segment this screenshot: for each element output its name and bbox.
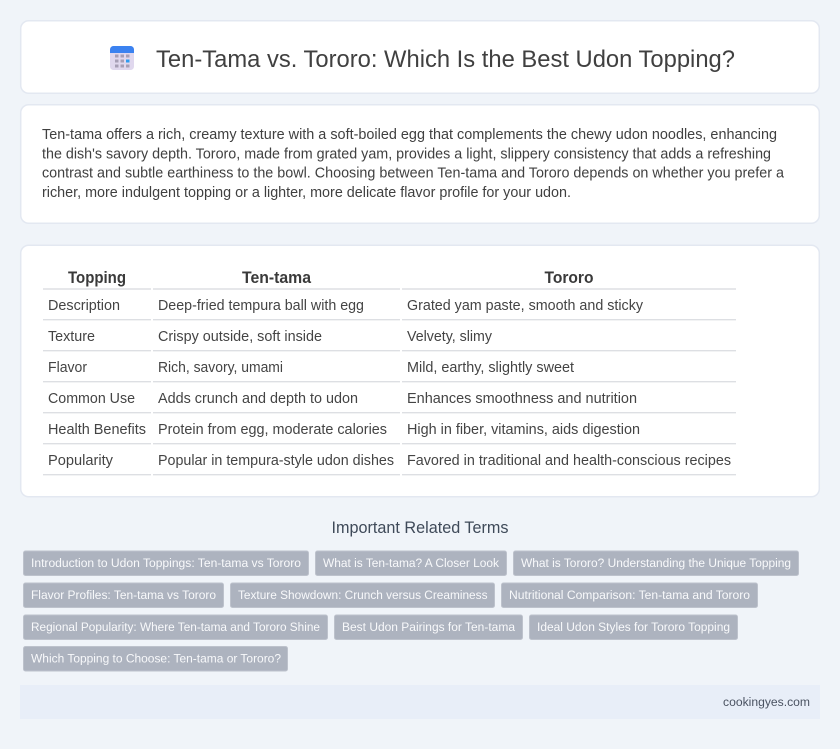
icon: calendar (110, 46, 134, 70)
row: flavor (48, 360, 574, 376)
panel: intro text (21, 105, 819, 223)
related term tags: What is Tororo? Understanding the Unique Topping (521, 556, 791, 570)
related term tags: Nutritional Comparison: Ten-tama and Tororo (509, 588, 750, 602)
row: health benefits (48, 422, 640, 438)
row: common use: Common Use (48, 391, 135, 407)
row: texture (48, 329, 493, 345)
related term tags: What is Ten-tama? A Closer Look (323, 556, 500, 570)
row: texture: Crispy outside, soft inside (158, 329, 322, 345)
related term tags: Ideal Udon Styles for Tororo Topping (537, 620, 730, 634)
table header: Topping (68, 269, 126, 287)
row: health benefits: Protein from egg, moderate calories (158, 422, 387, 438)
panel: comparison table (21, 245, 819, 497)
intro paragraph: the dish's savory depth. Tororo, made from grated yam, provides a light, slippery consistency that adds a refreshing (42, 146, 771, 162)
row: texture: Texture (48, 329, 95, 345)
row: health benefits: High in fiber, vitamins, aids digestion (407, 422, 640, 438)
header panel (21, 21, 819, 93)
intro paragraph (42, 127, 785, 201)
row: flavor: Rich, savory, umami (158, 360, 283, 376)
row: popularity: Popularity (48, 453, 114, 469)
row: popularity: Popular in tempura-style udon dishes (158, 453, 394, 469)
row: common use: Adds crunch and depth to udon (158, 391, 358, 407)
row: description: Deep-fried tempura ball with egg (158, 298, 364, 314)
table header (68, 269, 594, 287)
footer (20, 685, 820, 719)
row: description: Grated yam paste, smooth and sticky (407, 298, 644, 314)
row: flavor: Mild, earthy, slightly sweet (407, 360, 574, 376)
related term tags: Which Topping to Choose: Ten-tama or Tororo? (31, 652, 281, 666)
footer source text: cookingyes.com (723, 695, 810, 709)
table header: Ten-tama (242, 269, 312, 287)
related term tags: Regional Popularity: Where Ten-tama and Tororo Shine (31, 620, 320, 634)
table header: Tororo (544, 269, 594, 287)
row: common use (48, 391, 637, 407)
intro paragraph: contrast and subtle earthiness to the bowl. Choosing between Ten-tama and Tororo depends on whether you prefer a (42, 166, 785, 182)
intro paragraph: richer, more indulgent topping or a lighter, more delicate flavor profile for your udon. (42, 185, 571, 201)
row: common use: Enhances smoothness and nutrition (407, 391, 637, 407)
row: flavor: Flavor (48, 360, 87, 376)
related term tags: Texture Showdown: Crunch versus Creaminess (238, 588, 488, 602)
row: texture: Velvety, slimy (407, 329, 493, 345)
row: description: Description (48, 298, 120, 314)
related term tags: Flavor Profiles: Ten-tama vs Tororo (31, 588, 216, 602)
row: health benefits: Health Benefits (48, 422, 146, 438)
row: popularity (48, 453, 731, 469)
related term tags (24, 551, 798, 671)
title: Ten-Tama vs. Tororo: Which Is the Best Udon Topping? (156, 46, 735, 73)
related term tags: Best Udon Pairings for Ten-tama (342, 620, 515, 634)
intro paragraph: Ten-tama offers a rich, creamy texture with a soft-boiled egg that complements the chewy udon noodles, enhancing (42, 127, 777, 143)
related term tags: Introduction to Udon Toppings: Ten-tama vs Tororo (31, 556, 301, 570)
heading: related terms: Important Related Terms (332, 519, 508, 537)
row: description (48, 298, 644, 314)
row: popularity: Favored in traditional and health-conscious recipes (407, 453, 731, 469)
